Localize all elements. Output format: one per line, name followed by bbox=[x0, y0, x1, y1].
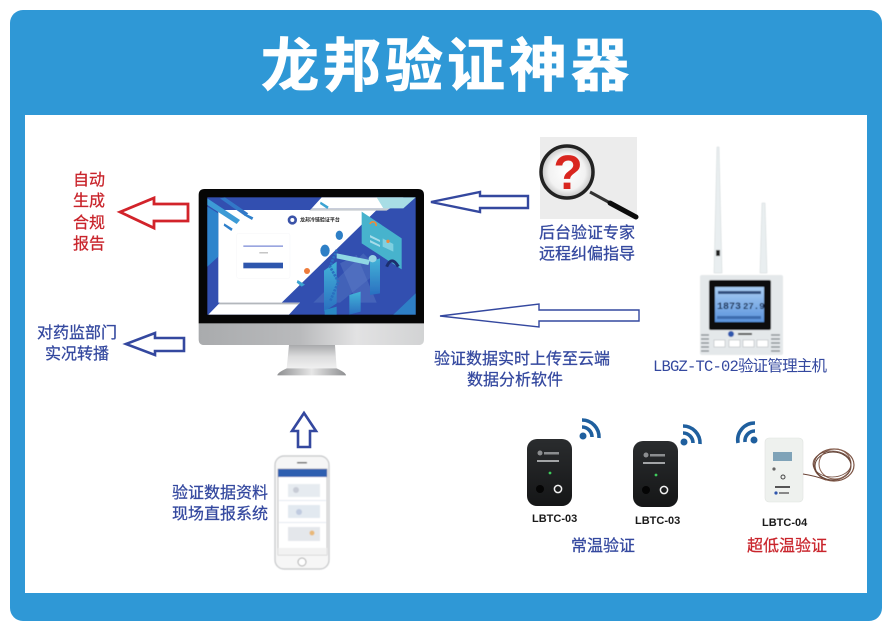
monitor stand bbox=[277, 345, 346, 375]
icon: magnifier with question mark bbox=[540, 137, 637, 219]
antenna right bbox=[760, 203, 767, 273]
host label: LBGZ-TC-02验证管理主机 bbox=[653, 357, 827, 376]
cloud upload label: 验证数据实时上传至云端 bbox=[434, 350, 610, 368]
report label: 自动 bbox=[73, 171, 105, 189]
phone label: 验证数据资料 bbox=[172, 484, 268, 502]
arrow: expert to monitor bbox=[431, 192, 528, 212]
device: management host: 27.9 bbox=[743, 302, 765, 312]
icon: wifi 2 bbox=[680, 426, 700, 446]
monitor chin bbox=[199, 323, 424, 345]
arrow: to report bbox=[120, 198, 188, 228]
regulator label: 实况转播 bbox=[45, 345, 109, 363]
antenna left bbox=[714, 147, 722, 273]
sensor 1 bbox=[527, 439, 572, 506]
screen: login page bbox=[207, 197, 416, 315]
title: 龙邦验证神器 bbox=[261, 34, 633, 99]
expert label: 后台验证专家 bbox=[539, 224, 635, 242]
cloud upload label bbox=[434, 350, 610, 389]
screen heading: 龙邦冷链验证平台 bbox=[300, 217, 340, 224]
white content panel bbox=[25, 115, 867, 593]
phone bbox=[275, 456, 329, 569]
report label: 报告 bbox=[73, 235, 105, 253]
expert label bbox=[539, 224, 635, 263]
regulator label: 对药监部门 bbox=[37, 324, 117, 342]
phone label bbox=[172, 484, 268, 523]
normal temperature label: 常温验证 bbox=[571, 537, 635, 555]
icon: wifi 3 bbox=[738, 423, 758, 444]
ultra-low temperature label: 超低温验证 bbox=[747, 537, 827, 555]
report label: 生成 bbox=[73, 192, 105, 210]
expert label: 远程纠偏指导 bbox=[539, 245, 635, 263]
phone label: 现场直报系统 bbox=[172, 505, 268, 523]
report label: 合规 bbox=[73, 214, 105, 232]
report label bbox=[73, 171, 105, 253]
monitor bbox=[199, 189, 424, 375]
device: management host bbox=[700, 147, 783, 355]
monitor bezel bbox=[199, 189, 424, 323]
regulator label bbox=[37, 324, 117, 363]
sensor 3 with probe bbox=[765, 438, 854, 502]
sensor 3 model: LBTC-04 bbox=[762, 517, 808, 529]
arrow: to regulator bbox=[126, 333, 184, 355]
arrow: phone to monitor bbox=[292, 413, 316, 447]
sensor 1 model: LBTC-03 bbox=[532, 513, 577, 525]
sensor 2 model: LBTC-03 bbox=[635, 515, 680, 527]
cloud upload label: 数据分析软件 bbox=[467, 371, 563, 389]
sensor 2 bbox=[633, 441, 678, 507]
arrow: host to monitor bbox=[440, 304, 639, 327]
icon: wifi 1 bbox=[580, 420, 599, 440]
icon: magnifier with question mark: ? bbox=[553, 147, 583, 200]
device: management host: 1873 bbox=[717, 302, 741, 313]
